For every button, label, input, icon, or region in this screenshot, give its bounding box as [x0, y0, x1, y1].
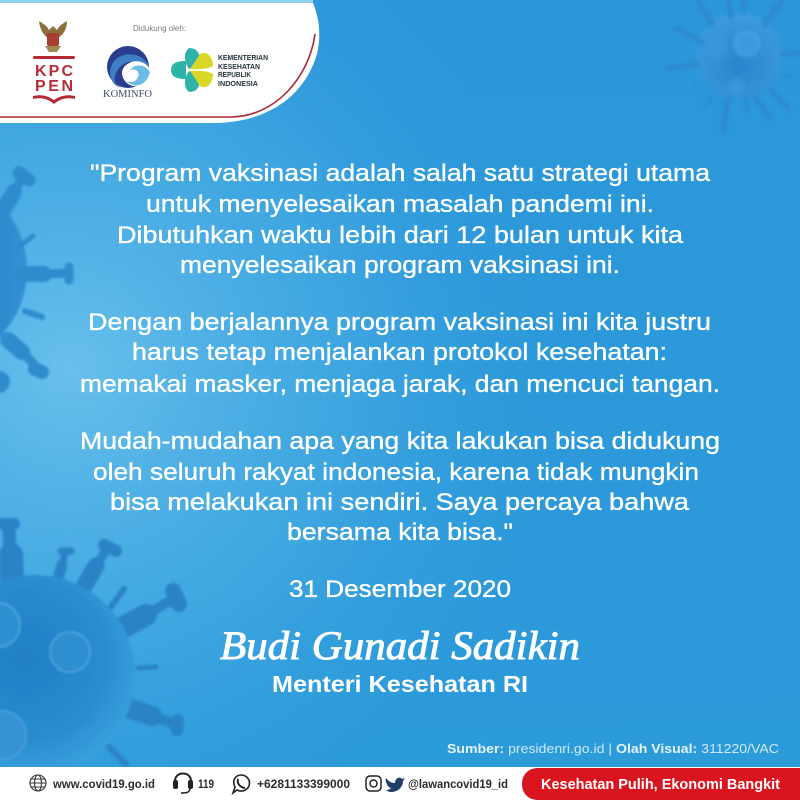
text: ministry name: KESEHATAN — [218, 62, 260, 71]
text: KPC: KPC — [35, 63, 73, 80]
red header line — [0, 34, 315, 117]
bar — [33, 56, 75, 59]
paragraph 3: bisa melakukan ini sendiri. Saya percaya bahwa — [110, 489, 689, 516]
virus: bottom left — [0, 524, 179, 775]
job title: Menteri Kesehatan RI — [272, 671, 528, 697]
paragraph 3: bersama kita bisa." — [287, 519, 513, 546]
white header shape — [0, 3, 319, 123]
paragraph 3 — [80, 428, 720, 546]
text: PEN: PEN — [35, 78, 73, 95]
text: ministry name: REPUBLIK — [218, 70, 252, 79]
text: whatsapp number: +6281133399000 — [257, 779, 350, 791]
text: hotline: 119 — [198, 779, 214, 791]
date: 31 Desember 2020 — [289, 576, 511, 603]
virus: left — [0, 173, 69, 393]
logo: Kominfo — [103, 46, 152, 100]
text: ministry name: INDONESIA — [218, 79, 258, 88]
paragraph 1 — [90, 160, 710, 279]
paragraph 1: menyelesaikan program vaksinasi ini. — [180, 252, 620, 279]
icon: whatsapp — [233, 775, 250, 793]
paragraph 2 — [80, 309, 720, 398]
icon: kominfo swirl — [107, 46, 150, 88]
text: website: www.covid19.go.id — [52, 779, 155, 791]
text: ministry name — [218, 53, 268, 88]
red slogan pill — [522, 768, 800, 800]
text: slogan: Kesehatan Pulih, Ekonomi Bangkit — [541, 777, 780, 793]
top cyan strip — [0, 0, 313, 3]
paragraph 2: harus tetap menjalankan protokol kesehatan: — [132, 339, 667, 366]
icon: globe — [30, 775, 46, 791]
icon: kemenkes leaves — [171, 48, 213, 92]
paragraph 3: oleh seluruh rakyat indonesia, karena tidak mungkin — [93, 459, 699, 486]
quote text — [80, 160, 720, 546]
book — [33, 95, 75, 104]
icon: garuda emblem — [39, 21, 67, 52]
source credit: Sumber: presidenri.go.id | Olah Visual: 311220/VAC — [447, 741, 779, 756]
paragraph 1: Dibutuhkan waktu lebih dari 12 bulan untuk kita — [117, 222, 683, 249]
paragraph 1: untuk menyelesaikan masalah pandemi ini. — [146, 191, 654, 218]
paragraph 3: Mudah-mudahan apa yang kita lakukan bisa didukung — [80, 428, 720, 455]
icon: twitter — [386, 778, 405, 792]
virus: top right — [668, 0, 800, 130]
text: supported by: Didukung oleh: — [133, 24, 186, 33]
white strip — [0, 767, 800, 800]
icon: instagram — [366, 776, 381, 791]
paragraph 1: "Program vaksinasi adalah salah satu strategi utama — [90, 160, 710, 187]
paragraph 2: Dengan berjalannya program vaksinasi ini kita justru — [88, 309, 711, 336]
paragraph 2: memakai masker, menjaga jarak, dan mencuci tangan. — [80, 371, 720, 398]
logo: KPC PEN — [33, 21, 75, 104]
text: ministry name: KEMENTERIAN — [218, 53, 268, 62]
text: KOMINFO: KOMINFO — [103, 89, 152, 100]
header panel — [0, 3, 319, 123]
footer bar — [0, 767, 800, 800]
icon: headset — [173, 774, 193, 793]
signature name: Budi Gunadi Sadikin — [220, 623, 580, 668]
logo: Kementerian Kesehatan — [171, 48, 268, 92]
text: social handle: @lawancovid19_id — [408, 779, 508, 791]
